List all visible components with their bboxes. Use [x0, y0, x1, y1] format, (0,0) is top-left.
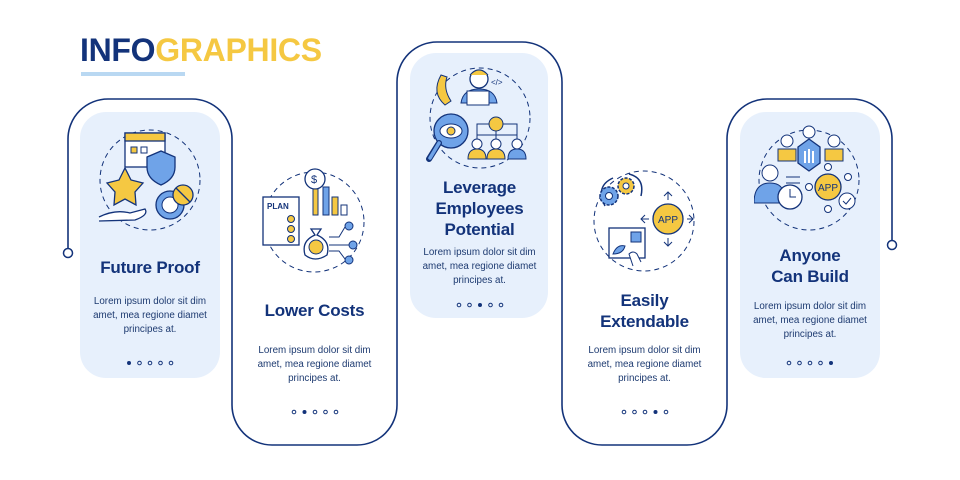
- icon: anyone can build: APP: [818, 183, 838, 194]
- heading: leverage employees: Employees: [436, 199, 523, 218]
- dots 4: [622, 410, 668, 414]
- heading: anyone can build: Can Build: [771, 267, 849, 286]
- heading: leverage employees: Leverage: [443, 178, 516, 197]
- heading: anyone can build: Anyone: [779, 246, 841, 265]
- text: easily extendable: Lorem ipsum dolor sit dim: [588, 345, 701, 356]
- heading: future proof: Future Proof: [100, 258, 200, 277]
- text: easily extendable: principes at.: [618, 373, 671, 384]
- text: easily extendable: amet, mea regione diamet: [588, 359, 701, 370]
- text: leverage employees: amet, mea regione diamet: [423, 261, 536, 272]
- text: anyone can build: Lorem ipsum dolor sit dim: [754, 301, 866, 312]
- text: lower costs: principes at.: [288, 373, 341, 384]
- dots 2: [292, 410, 338, 414]
- heading: easily extendable: [600, 291, 689, 331]
- text: lower costs: [258, 345, 372, 384]
- heading: easily extendable: Extendable: [600, 312, 689, 331]
- text: future proof: amet, mea regione diamet: [93, 310, 207, 321]
- text: leverage employees: [423, 247, 536, 286]
- icon: lower costs: $: [311, 174, 317, 186]
- icon: easily extendable: APP: [658, 215, 678, 226]
- text: future proof: principes at.: [124, 324, 176, 335]
- text: anyone can build: [753, 301, 867, 340]
- icon: leverage employees: </>: [491, 78, 503, 87]
- icon: lower costs: [262, 168, 364, 272]
- dots 3: [456, 302, 504, 308]
- heading: lower costs: Lower Costs: [265, 301, 364, 320]
- text: lower costs: Lorem ipsum dolor sit dim: [258, 345, 371, 356]
- text: leverage employees: principes at.: [453, 275, 506, 286]
- dots 5: [786, 360, 833, 366]
- text: future proof: [93, 296, 207, 335]
- heading: leverage employees: Potential: [444, 220, 514, 239]
- icon: leverage employees: [426, 68, 530, 168]
- dots 1: [127, 360, 174, 366]
- icon: anyone can build: [754, 126, 860, 230]
- text: anyone can build: amet, mea regione diamet: [753, 315, 867, 326]
- text: lower costs: amet, mea regione diamet: [258, 359, 371, 370]
- text: easily extendable: [588, 345, 702, 384]
- text: anyone can build: principes at.: [784, 329, 836, 340]
- icon: future proof: [98, 130, 200, 230]
- title: INFOGRAPHICS: [80, 32, 322, 68]
- text: leverage employees: Lorem ipsum dolor sit dim: [423, 247, 536, 258]
- heading: leverage employees: [436, 178, 523, 239]
- heading: easily extendable: Easily: [621, 291, 668, 310]
- text: future proof: Lorem ipsum dolor sit dim: [94, 296, 206, 307]
- icon: lower costs: PLAN: [267, 202, 289, 211]
- heading: anyone can build: [771, 246, 849, 286]
- icon: easily extendable: [594, 170, 694, 272]
